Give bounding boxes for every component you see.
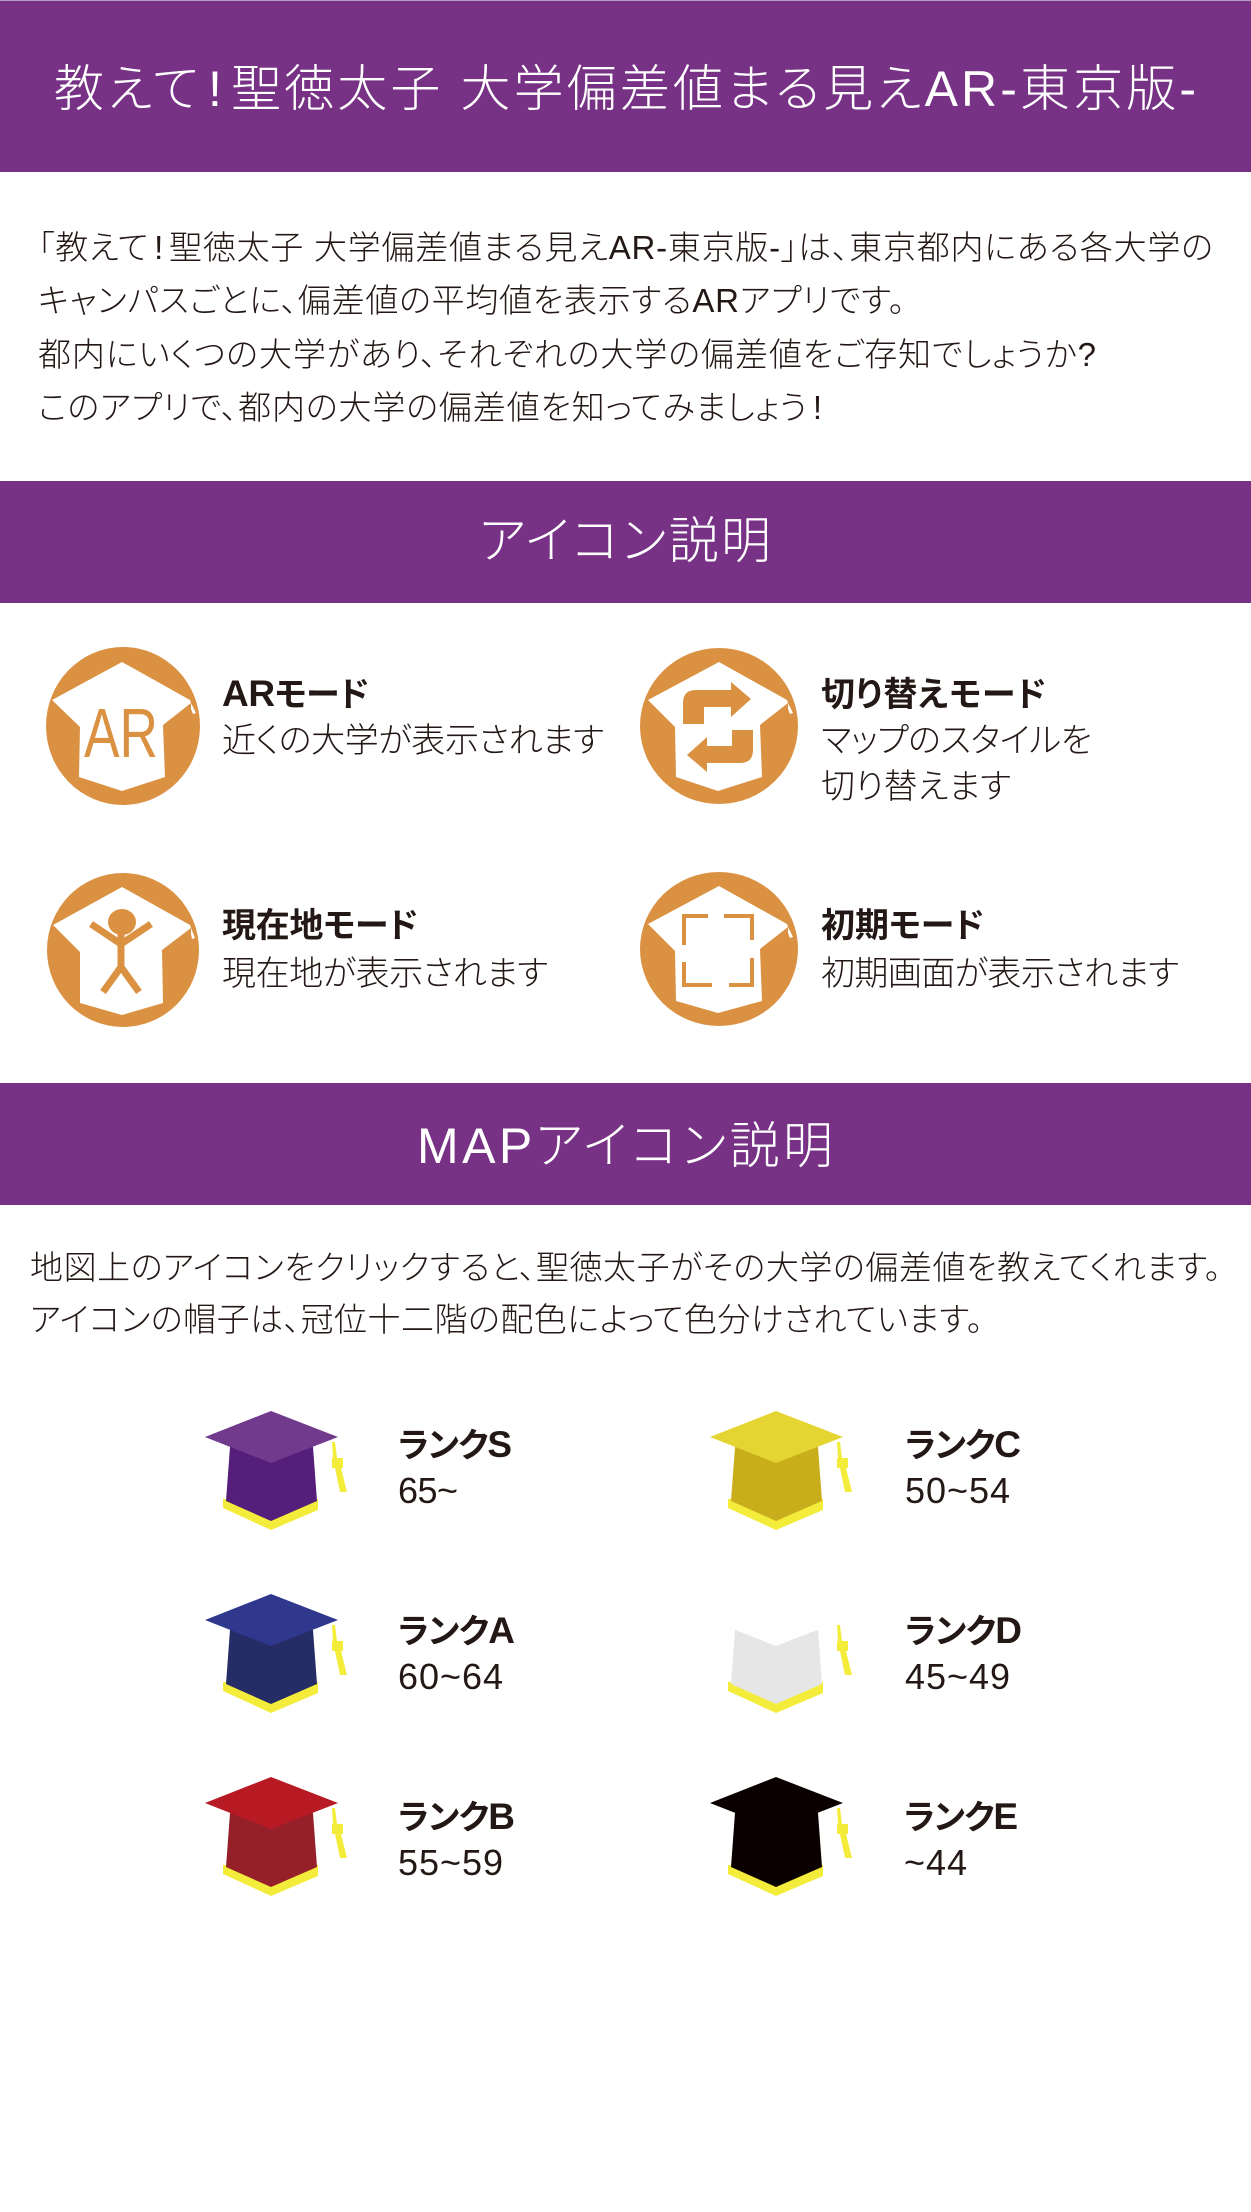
- intro text block: キャンパスごとに、偏差値の平均値を表示するARアプリです。: [38, 282, 905, 319]
- label: rank C: [905, 1424, 1021, 1511]
- label: rank A: ランクA: [398, 1610, 515, 1651]
- label: rank A: [398, 1610, 515, 1697]
- intro text block: [38, 229, 1213, 426]
- label: rank S: 65~: [398, 1470, 458, 1511]
- section heading: アイコン説明: [479, 513, 771, 569]
- text: switch mode: 切り替えます: [821, 768, 1011, 806]
- map explanation text: [30, 1249, 1221, 1338]
- label: rank E: ~44: [904, 1842, 967, 1883]
- icon: hat rank D: [710, 1594, 852, 1713]
- label: rank D: [905, 1610, 1022, 1697]
- text: current location mode: [222, 907, 548, 993]
- map explanation text: 地図上のアイコンをクリックすると、聖徳太子がその大学の偏差値を教えてくれます。: [30, 1249, 1221, 1286]
- icon: initial mode: [640, 872, 798, 1026]
- label: rank B: 55~59: [398, 1842, 503, 1883]
- text: AR mode: 近くの大学が表示されます: [222, 722, 604, 760]
- text: current location mode: 現在地が表示されます: [222, 955, 548, 993]
- map explanation text: アイコンの帽子は、冠位十二階の配色によって色分けされています。: [30, 1301, 983, 1338]
- section banner: icon explanation: [0, 481, 1251, 603]
- icon: hat rank A: [205, 1594, 347, 1713]
- text: initial mode: 初期画面が表示されます: [821, 955, 1179, 993]
- text: switch mode: [821, 676, 1092, 806]
- icon: hat rank B: [205, 1777, 347, 1896]
- icon: switch mode: [640, 648, 798, 804]
- text: switch mode: 切り替えモード: [821, 676, 1046, 714]
- label: rank D: ランクD: [905, 1610, 1022, 1651]
- intro text block: 「教えて!聖徳太子 大学偏差値まる見えAR-東京版-」は、東京都内にある各大学の: [38, 229, 1213, 266]
- label: rank B: ランクB: [398, 1796, 515, 1837]
- icon: AR mode: AR: [84, 694, 158, 772]
- label: rank B: [398, 1796, 515, 1883]
- text: initial mode: 初期モード: [821, 907, 984, 945]
- text: AR mode: ARモード: [222, 673, 369, 714]
- icon: hat rank E: [710, 1777, 852, 1896]
- label: rank E: ランクE: [904, 1796, 1018, 1837]
- label: rank C: 50~54: [905, 1470, 1010, 1511]
- text: AR mode: [222, 673, 604, 760]
- label: rank C: ランクC: [905, 1424, 1021, 1465]
- icon: AR mode: [46, 647, 200, 805]
- label: rank D: 45~49: [905, 1656, 1010, 1697]
- title banner: [0, 0, 1251, 172]
- section heading: MAPアイコン説明: [417, 1118, 833, 1174]
- text: switch mode: マップのスタイルを: [821, 722, 1092, 760]
- label: rank S: [398, 1424, 512, 1511]
- section banner: map icon explanation: [0, 1083, 1251, 1205]
- label: rank S: ランクS: [398, 1424, 512, 1465]
- title: 教えて!聖徳太子 大学偏差値まる見えAR-東京版-: [54, 61, 1196, 117]
- icon: hat rank S: [205, 1411, 347, 1530]
- text: current location mode: 現在地モード: [222, 907, 418, 945]
- intro text block: 都内にいくつの大学があり、それぞれの大学の偏差値をご存知でしょうか?: [38, 336, 1096, 373]
- text: initial mode: [821, 907, 1179, 993]
- label: rank E: [904, 1796, 1018, 1883]
- intro text block: このアプリで、都内の大学の偏差値を知ってみましょう!: [38, 389, 822, 426]
- icon: current location mode: [47, 873, 199, 1027]
- icon: hat rank C: [710, 1411, 852, 1530]
- label: rank A: 60~64: [398, 1656, 503, 1697]
